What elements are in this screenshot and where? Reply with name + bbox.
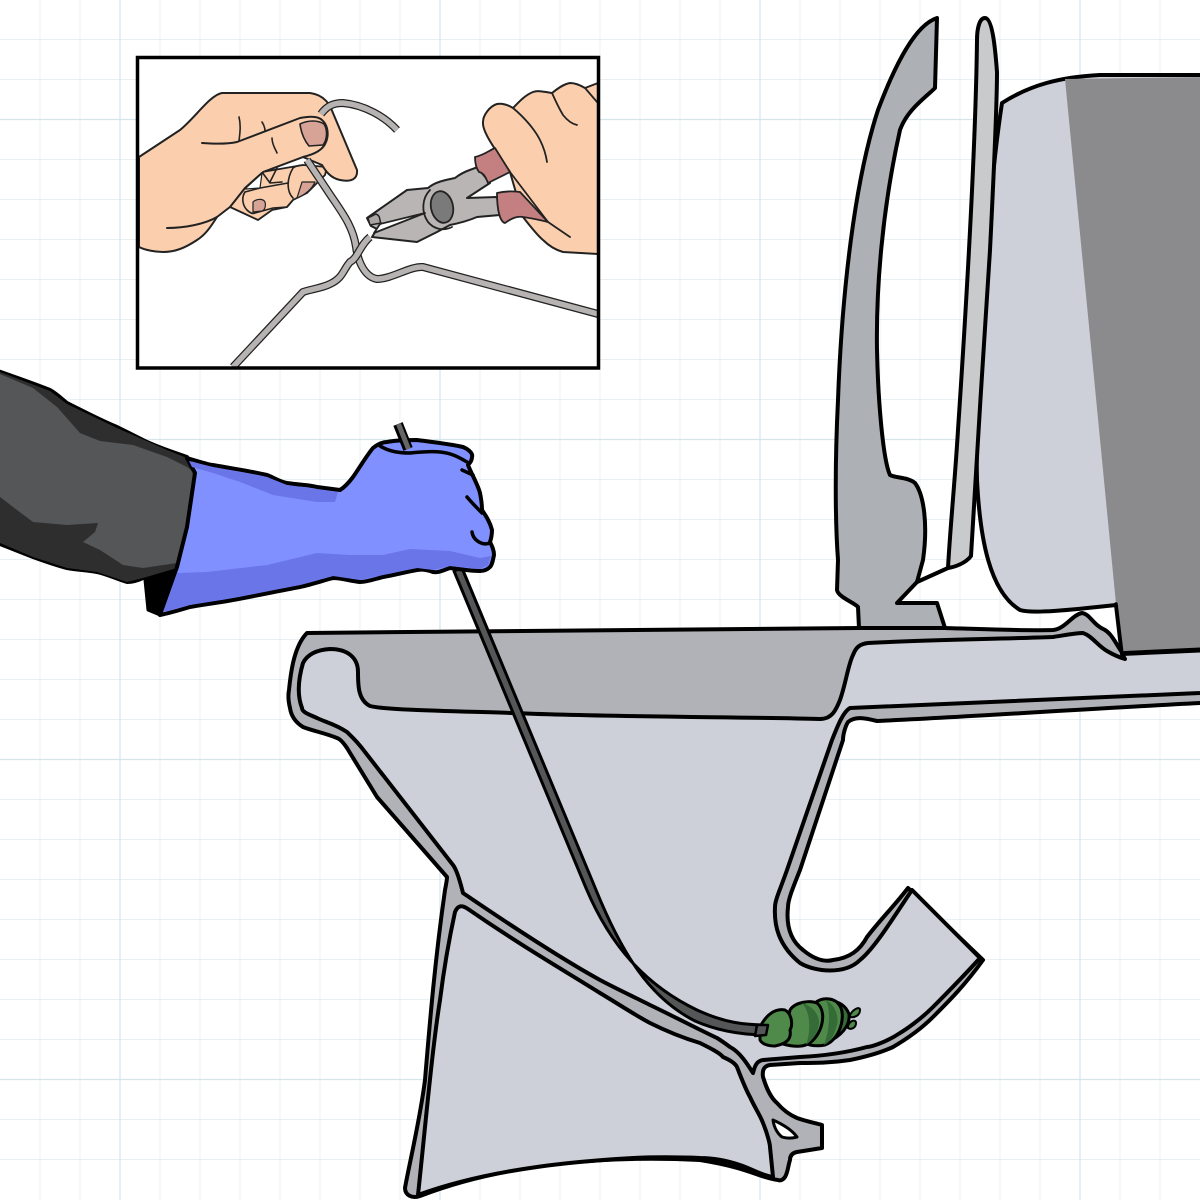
inset frame — [138, 58, 598, 368]
pliers handles — [475, 148, 510, 183]
palm — [139, 93, 357, 252]
gap between fingers — [245, 173, 262, 189]
left hand — [139, 93, 357, 252]
fingernails — [253, 199, 265, 212]
right hand creases — [510, 88, 597, 237]
clog of hair and debris — [755, 999, 860, 1046]
wire rod — [454, 568, 768, 1035]
sleeve shadows — [0, 372, 195, 473]
small fingers — [230, 165, 327, 220]
toilet outer shell — [288, 613, 1200, 1197]
blue rubber glove — [160, 440, 494, 615]
sleeve — [0, 370, 195, 582]
toilet body — [288, 613, 1200, 1197]
foot hole — [773, 1120, 797, 1138]
toilet inner bowl and trap — [299, 633, 1200, 1073]
toilet lid — [917, 18, 997, 582]
rod end above glove — [398, 424, 408, 449]
pliers — [367, 148, 548, 242]
inset panel: bending the wire hanger with pliers — [138, 58, 598, 368]
inside of glove cuff — [145, 567, 177, 615]
thumb — [202, 117, 328, 172]
toilet pedestal — [418, 906, 773, 1195]
finger creases — [380, 446, 490, 544]
arm in dark sleeve — [0, 370, 195, 615]
right hand — [483, 83, 598, 254]
wire hanger — [233, 103, 598, 367]
toilet seat — [836, 18, 945, 628]
glove shadows — [189, 461, 338, 502]
toilet tank — [977, 75, 1200, 656]
